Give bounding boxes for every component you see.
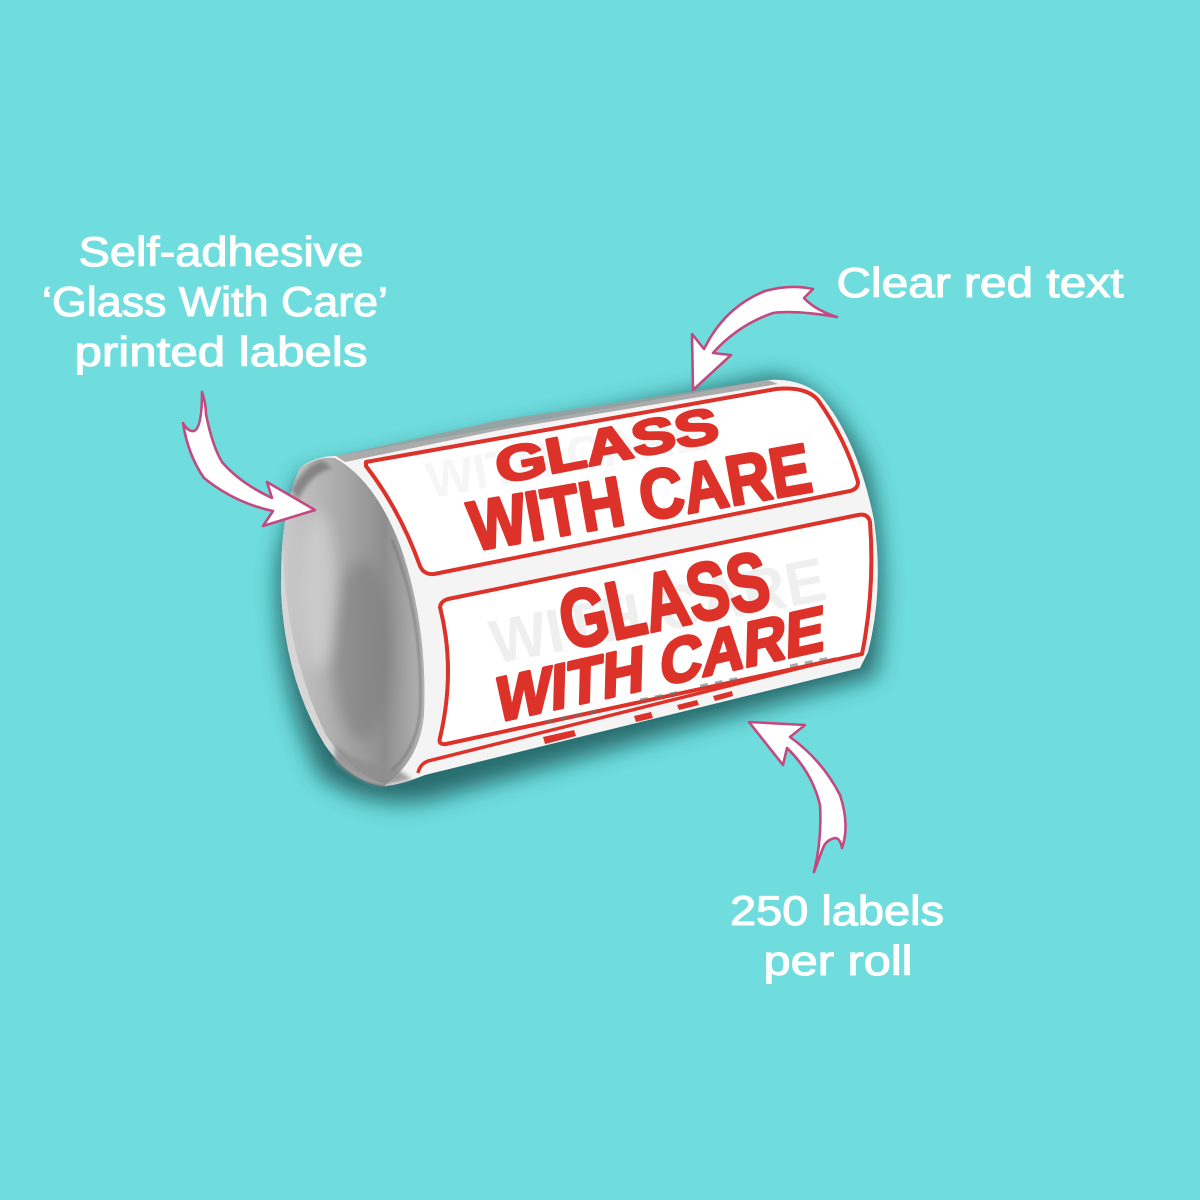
caption: self-adhesive printed labels [42, 228, 388, 375]
caption: 250 labels per roll: 250 labels [730, 887, 944, 934]
label three: partial lower label [418, 658, 836, 773]
label two: middle [440, 515, 871, 744]
roll body [281, 380, 878, 786]
label two: middle: WITH CARE [485, 545, 831, 678]
arrow: to roll end [183, 392, 315, 526]
caption: 250 labels per roll [730, 887, 944, 984]
arrow: to red text [692, 287, 837, 390]
caption: 250 labels per roll: per roll [764, 937, 912, 984]
label two text: with care: WITH CARE [496, 593, 826, 737]
label one: upper: WITH CARE [422, 404, 711, 509]
caption: self-adhesive printed labels: ‘Glass With Care’ [42, 278, 388, 325]
caption: self-adhesive printed labels: Self-adhesive [78, 228, 364, 275]
caption: self-adhesive printed labels: printed labels [74, 328, 368, 375]
label one text: glass: GLASS [491, 397, 723, 495]
label one text: with care: WITH CARE [463, 429, 817, 566]
roll top edge [336, 380, 778, 462]
arrow: to roll bottom [749, 722, 846, 872]
roll drop shadow [277, 376, 882, 803]
product: glass with care label roll [277, 376, 882, 803]
label one: upper [366, 388, 858, 574]
caption: clear red text: Clear red text [836, 259, 1124, 306]
label two text: glass: GLASS [551, 535, 777, 668]
roll inner opening [281, 458, 424, 786]
